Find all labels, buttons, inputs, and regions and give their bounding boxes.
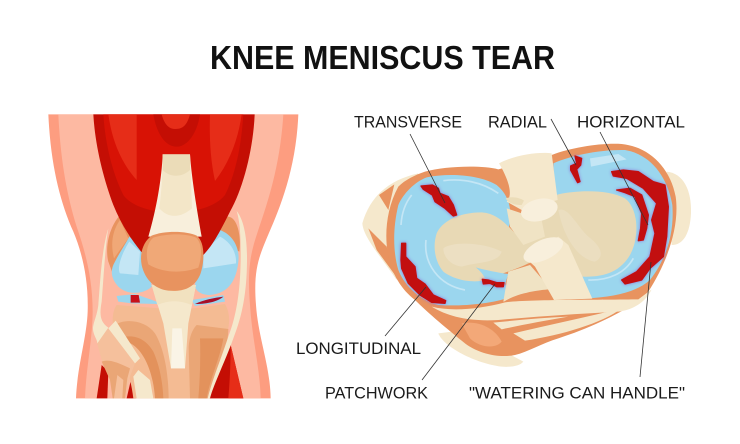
quadriceps tendon — [148, 154, 202, 237]
synovial fluid — [112, 230, 239, 295]
outer ligaments — [362, 172, 691, 367]
meniscus front with tears — [117, 294, 225, 306]
label: watering can handle: "WATERING CAN HANDLE" — [469, 384, 685, 402]
plateau rim — [386, 144, 676, 356]
femur condyles — [107, 215, 240, 280]
fibula — [97, 321, 153, 398]
label: radial: RADIAL — [488, 112, 547, 132]
quadriceps muscle — [93, 114, 255, 255]
tear: longitudinal — [401, 243, 446, 303]
label: longitudinal: LONGITUDINAL — [296, 339, 421, 358]
tears — [401, 156, 668, 303]
tibial plateau centre — [435, 191, 636, 281]
tear: patchwork — [482, 279, 504, 287]
label: horizontal: HORIZONTAL — [577, 112, 685, 132]
tear: radial — [571, 156, 582, 183]
title: KNEE MENISCUS TEAR — [210, 39, 555, 76]
lower leg muscles — [97, 345, 243, 398]
illustration: top view of tibial plateau — [362, 144, 691, 367]
tendons — [499, 153, 592, 302]
patella — [141, 232, 203, 291]
medial meniscus — [553, 150, 673, 298]
tear: transverse — [421, 185, 457, 216]
pointer lines — [385, 119, 651, 380]
tear: horizontal — [612, 170, 668, 284]
patellar tendon — [152, 285, 196, 368]
ligament bands — [432, 289, 652, 341]
tear: watering can handle inner — [617, 188, 648, 241]
skin — [48, 114, 298, 398]
illustration: front view of knee — [48, 114, 298, 398]
patchwork flap — [476, 267, 508, 289]
tibia — [113, 304, 229, 398]
label: transverse: TRANSVERSE — [354, 112, 462, 132]
label: patchwork: PATCHWORK — [325, 384, 429, 402]
lateral meniscus — [394, 175, 511, 305]
side ligaments — [93, 211, 247, 398]
